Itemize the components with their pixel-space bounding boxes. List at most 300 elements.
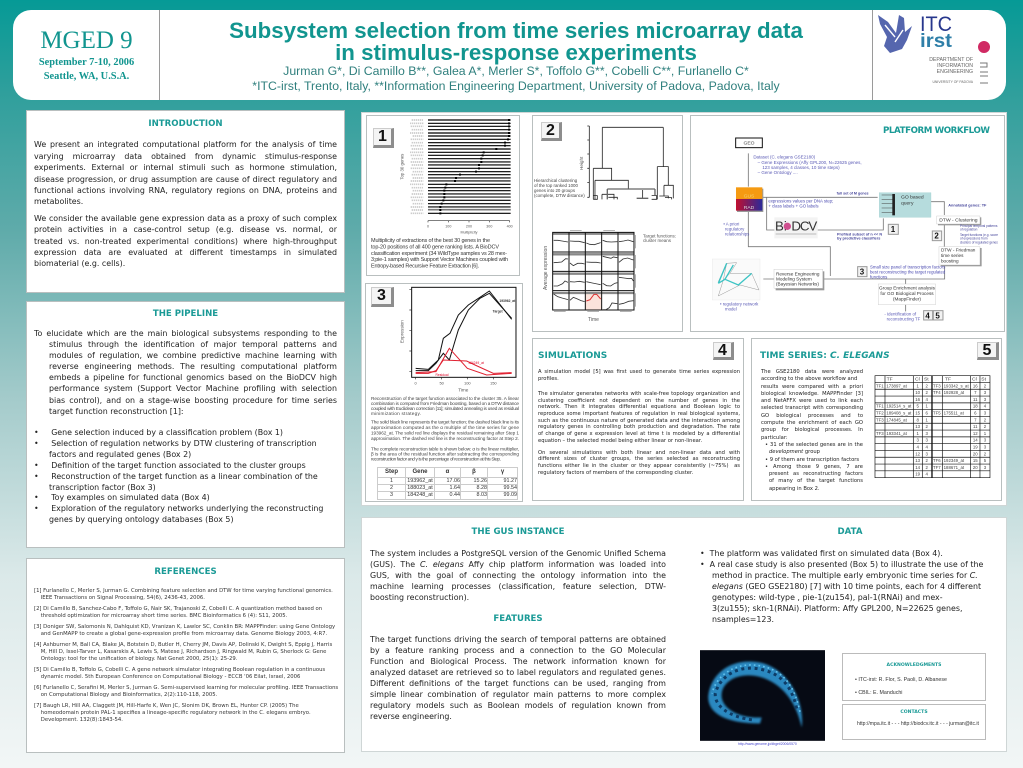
table: reconstruction steps: Gene: [412, 469, 428, 475]
table: transcription factors: 3: [925, 431, 928, 436]
table: transcription factors: 3: [984, 390, 987, 395]
table: reconstruction steps: 17.06: [446, 478, 460, 484]
panel: contacts: [842, 704, 986, 740]
badge 4: [713, 342, 734, 360]
chart: multiplicity dot plot: [400, 120, 513, 235]
table: transcription factors: 193342_s_at: [944, 383, 969, 388]
table: transcription factors: TF7: [933, 465, 941, 470]
block: GUS and RAD databases: RAD: [744, 205, 755, 211]
box: GEO: [736, 138, 762, 148]
list: pipeline steps: factors and regulated genes (Box 2): [49, 450, 191, 459]
text: introduction body: protein activities in a case-control setup (e.g. disease vs. normal, or: [34, 225, 337, 234]
text: features body: simple linear combination of regulator main patterns to more complex: [370, 690, 666, 698]
box: GEO: GEO: [743, 141, 755, 147]
text: box 1 caption: [371, 238, 508, 270]
table: transcription factors: 173897_at: [886, 383, 908, 388]
text: pipeline body: bias control), and on a stage-wise boosting procedure for time series: [49, 396, 337, 405]
panel: box 1: [366, 115, 520, 276]
text: acknowledgment names: • CBIL: E. Manduchi: [855, 690, 902, 696]
table: transcription factors: 1: [925, 417, 928, 422]
text: box 3 caption: approximation. The dashed red line is the reconstructing factor at Step 2.: [371, 436, 519, 441]
conference block: [13, 10, 160, 100]
text: pipeline body: modules of regulation, we combine predictive machine learning with: [49, 351, 337, 360]
list: pipeline steps: • Toy examples on simulated data (Box 4): [34, 493, 210, 502]
text: small size panel: functions: [870, 275, 887, 280]
table: transcription factors: 174845_at: [886, 417, 908, 422]
text: reference list: dynamic model. 5th European Conference on Computational Biology - ECCB '06 Eilat, Israel, 2006: [41, 674, 300, 680]
table: transcription factors: TF3: [876, 417, 884, 422]
text: dendrogram caption: (complete, DTW distance): [534, 193, 585, 198]
mini badges: 1: [891, 225, 896, 234]
text: small size panel: Small size panel of transcription factors: [870, 265, 945, 270]
table: transcription factors: 192928_at: [944, 390, 965, 395]
table: transcription factors: 12: [915, 451, 921, 456]
text: time series body: of many of the target functions: [769, 478, 863, 484]
table: transcription factors: 3: [984, 411, 987, 416]
text: time series body: [761, 369, 863, 492]
icon: red dot: [978, 41, 990, 53]
text: simulations body: [538, 369, 740, 476]
heading: introduction: INTRODUCTION: [148, 119, 223, 129]
table: transcription factors: 2: [984, 383, 987, 388]
chart: multiplicity dot plot: 0: [427, 225, 429, 229]
table: transcription factors: St: [924, 377, 929, 383]
label: small multiples legend and axes: [543, 234, 676, 323]
text: pipeline body: embeds a pipeline for functional genomics based on the BioDCV high: [49, 373, 337, 382]
chart: multiplicity dot plot: 300: [486, 225, 492, 229]
text: data bullets: method in practice. The multiple early embryonic time series for C.: [712, 570, 978, 580]
text: regulatory network model: model: [725, 306, 737, 311]
text: dataset description: – Gene Expressions (Affy GPL200, N=22625 genes,: [758, 160, 862, 165]
text: simulations body: functions either lie in the cluster or they appear consistently (~75%) as: [538, 463, 740, 469]
text: reference list: threshold optimization for microarray short time series. BMC Bioinformatics 6 (4): S11, 2005.: [41, 613, 287, 619]
table: transcription factors: 7: [974, 390, 977, 395]
text: profiled subset: [837, 232, 882, 241]
text: reference list: [2] Di Camillo B, Sanchez-Cabo F, Toffolo G, Nair SK, Trajanoski Z, Cobelli C. A quantization method based on: [34, 606, 322, 612]
table: reconstruction steps: [377, 467, 518, 500]
table: transcription factors: 2: [925, 383, 928, 388]
table: transcription factors: 6: [925, 411, 928, 416]
text: reference list: [5] Di Camillo B, Toffolo G, Cobelli C. A gene network simulator integrating Boolean regulation in a continuous: [34, 667, 325, 673]
badge 1: [373, 128, 394, 148]
text: simulations body: reproduce some important features of regulation in real biological systems,: [538, 411, 740, 417]
table: transcription factors: 3: [925, 451, 928, 456]
table: transcription factors: 11: [973, 424, 978, 429]
text: DTW outputs: of expressions from: [960, 237, 988, 241]
label: small multiples legend and axes: Average expression: [543, 246, 549, 290]
text: introduction body: varying microarray data obtained from dynamic stimulus-response: [34, 152, 337, 161]
text: DTW outputs: Target functions (e.g. score: [960, 233, 998, 237]
text: data bullets: • The platform was validated first on simulated data (Box 4).: [700, 548, 943, 558]
table: transcription factors: TF1: [876, 404, 884, 409]
heading: contacts: CONTACTS: [900, 710, 928, 715]
box: DTW Friedman boosting: boosting: [941, 258, 959, 263]
logo: department of information engineering: DEPARTMENT OF: [929, 57, 973, 63]
text: a priori relationships: regulatory: [725, 227, 745, 232]
chart: regulatory network: [712, 259, 760, 300]
chart: target reconstruction curves: 100: [464, 381, 471, 386]
table: transcription factors: 15: [915, 411, 921, 416]
text: dataset description: Dataset (C. elegans GSE2180): [753, 154, 816, 159]
table: transcription factors: 14: [915, 465, 921, 470]
table: reconstruction steps: 1.64: [450, 485, 460, 491]
panel: box 3: [365, 283, 523, 502]
text: introduction body: disease progression, or drug assumption are cause of direct regulatory and: [34, 175, 337, 184]
table: transcription factors: 19: [915, 472, 921, 477]
chart: target reconstruction curves: Residual: [436, 373, 449, 377]
chart: target reconstruction curves: Expression: [399, 320, 404, 343]
table: reconstruction steps: 99.09: [504, 492, 517, 498]
logo: ITC irst wordmark: ITC: [920, 13, 952, 36]
text: introduction body: biomaterial (e.g. cells).: [34, 259, 125, 268]
table: transcription factors: 2: [925, 465, 928, 470]
text: reference list: [1] Furlanello C, Merler S, Jurman G. Combining feature selection and DTW for time varying functional genomics.: [34, 588, 333, 594]
panel: centre figures background: [361, 112, 1007, 506]
heading: time series: TIME SERIES: C. ELEGANS: [760, 351, 890, 361]
panel: acknowledgments: [842, 653, 986, 701]
text: simulations body: of change of gene x expression level at time t is modeled by a differential: [538, 431, 740, 437]
text: time series body: according to the above workflow and: [761, 376, 857, 382]
text: box 3 caption: The solid black line represents the target function; the dashed black line is its: [371, 420, 520, 424]
table: transcription factors: TF3: [876, 431, 884, 436]
box: group enrichment: (MappFinder): [893, 296, 921, 301]
title: [229, 18, 804, 65]
mini badges: 4: [925, 311, 930, 320]
table: transcription factors: TF1: [876, 383, 884, 388]
text: data bullets: genotypes: wild-type , pie-1(zu154), pal-1(RNAi) and mex-: [712, 592, 943, 602]
text: simulations body: different sizes of cluster groups, the series selected as reconstructing: [538, 456, 740, 462]
text: introduction body: metabolites.: [34, 197, 83, 206]
logos column: [872, 10, 1006, 100]
text: time series body: results were compared with a priori: [761, 384, 863, 390]
table: transcription factors: 189408_s_at: [886, 411, 912, 416]
text: time series body: appearing in Box 2.: [769, 486, 820, 492]
panel: references: [26, 558, 345, 753]
text: simulations body: equation – the selected model being either linear or non-linear.: [538, 438, 702, 444]
text: dendrogram caption: [534, 178, 585, 198]
badge 4: 4: [718, 342, 727, 359]
caption: image link: http://www.genome.jp/dbget/2006/0570: [738, 742, 797, 746]
chart: target reconstruction curves: 193962_at: [499, 299, 516, 303]
table: reconstruction steps: 8.03: [476, 492, 487, 498]
table: reconstruction steps: 8.28: [476, 485, 487, 491]
text: small size panel: [870, 265, 946, 280]
text: box 3 caption: The complete reconstruction table is shown below: α is the linear multiplier,: [371, 446, 519, 452]
mini badges: [858, 224, 943, 320]
text: time series body: selected transcript with corresponding: [761, 405, 863, 411]
text: introduction body: experiments. External or internal stimuli such as hormone stimulation,: [34, 163, 337, 172]
text: a priori relationships: • A priori: [723, 222, 739, 227]
table: transcription factors: 1: [984, 431, 987, 436]
panel: lower section: [361, 517, 1007, 752]
text: pipeline body: target function reconstruction [1]:: [49, 407, 184, 416]
heading: data: DATA: [838, 527, 862, 537]
icon: ITC bird logo: [878, 15, 912, 53]
table: reconstruction steps: 193962_at: [407, 478, 433, 484]
text: GUS body: boosting reconstruction).: [370, 592, 469, 602]
logo: BioDCV: [774, 217, 818, 238]
text: data bullets: • A real case study is also presented (Box 5) to illustrate the use of the: [700, 560, 983, 568]
table: transcription factors: 3: [984, 465, 987, 470]
panel: the pipeline: [26, 301, 345, 548]
text: reference list: M, Hill D, Issel-Tarver L, Kasarskis A, Lewis S, Matese J, Richardson J, Ringwald M, Rubin G, Sherlock G: Gene: [41, 649, 326, 655]
table: reconstruction steps: 2: [390, 485, 393, 491]
text: pipeline body: performance system (Support Vector Machine profiling with selection: [49, 384, 337, 393]
table: reconstruction steps: α: [446, 469, 449, 475]
text: time series body: biological knowledge. MAPPFinder [3]: [761, 391, 863, 397]
text: introduction body: treated vs. non-treated experimental conditions) where high-throughput: [34, 237, 337, 246]
table: transcription factors: St: [981, 377, 987, 383]
text: simulations body: regulatory factors of members of the corresponding cluster.: [538, 470, 693, 476]
text: DTW outputs: Principal temporal patterns: [960, 224, 998, 228]
text: acknowledgment names: • ITC-irst: R. Flor, S. Paoli, D. Albanese: [855, 677, 947, 683]
text: time series body: group for biological processes. In: [761, 427, 863, 433]
logo: ITC irst wordmark: [920, 13, 953, 52]
table: transcription factors: 18: [973, 404, 978, 409]
text: reference list: [3] Doniger SW, Salomonis N, Dahlquist KD, Vranizan K, Lawlor SC, Conklin BR: MAPPFinder: using Gene Ontology: [34, 624, 335, 630]
panel: introduction: [26, 110, 345, 293]
box: group enrichment: [878, 284, 936, 305]
table: transcription factors: 19: [973, 445, 978, 450]
table: transcription factors: 7: [974, 417, 977, 422]
box: reverse engineering: Reverse Engineering: [776, 271, 820, 276]
text: reference list: IEEE Transactions on Signal Processing, 54(6), 2436-43, 2006.: [41, 595, 205, 601]
table: transcription factors: 3: [984, 397, 987, 402]
text: box 1 caption: top-20 positions of all 400 gene ranking lists. A BioDCV: [371, 244, 499, 250]
text: box 3 caption: Reconstruction of the target function associated to the cluster 35. A linear: [371, 396, 519, 401]
text: simulations body: regulatory genes in controlling both production and degradation. The rate: [538, 424, 740, 430]
logo: department of information engineering: ENGINEERING: [937, 69, 973, 75]
text: box 1 caption: Entropy-based Recursive Feature Extraction [6].: [371, 264, 479, 270]
list: pipeline steps: [34, 428, 323, 524]
text: time series body: particular:: [761, 435, 788, 441]
table: transcription factors: 16: [973, 383, 978, 388]
heading: the pipeline: THE PIPELINE: [153, 309, 218, 319]
text: time series body: The GSE2180 data were analyzed: [761, 369, 863, 375]
text: box 3 caption: approximation computed as the α multiple of the time series for gene: [371, 425, 519, 430]
table: transcription factors: Cl: [972, 377, 977, 383]
block: GUS and RAD databases: [736, 187, 763, 212]
text: time series body: compute the enrichment of each GO: [761, 420, 863, 426]
text: simulations body: clustering coefficient not dependent on the number of genes in the: [538, 398, 740, 404]
list: pipeline steps: • Selection of regulation networks by DTW clustering of transcription: [34, 439, 317, 448]
text: time series body: and NetAFFX were used to link each: [761, 398, 863, 404]
text: DTW outputs: clusters of regulated genes: [960, 240, 998, 244]
chart: multiplicity dot plot: 400: [507, 225, 513, 229]
table: transcription factors: Cl: [915, 377, 920, 383]
chart: multiplicity dot plot: 100: [445, 225, 451, 229]
heading: platform workflow: PLATFORM WORKFLOW: [883, 126, 990, 136]
title: Subsystem selection from time series microarray data: [229, 18, 803, 43]
text: expression values: expressions values per DNA step;: [768, 198, 833, 203]
table: transcription factors: 1: [916, 383, 919, 388]
box: GO based query: query: [901, 201, 914, 207]
text: regulatory network model: • regulatory network: [720, 301, 759, 306]
mini badges: 3: [860, 267, 865, 276]
text: time series body: • Among those 9 genes, 7 are: [765, 464, 863, 470]
text: dataset description: 123 samples, 4 classes, 10 time steps): [762, 165, 840, 170]
conference block: September 7-10, 2006: [39, 57, 134, 68]
chart: target reconstruction curves: 50: [439, 381, 445, 386]
table: reconstruction steps: 99.54: [504, 485, 517, 491]
list: pipeline steps: • Reconstruction of the target function as a linear combination of the: [34, 472, 318, 481]
text: features body: Different definitions of the target functions can be used, ranging from: [370, 678, 666, 688]
table: transcription factors: 3: [925, 438, 928, 443]
text: reference list: [34, 588, 338, 723]
text: regulatory network model: [720, 301, 759, 311]
table: transcription factors: 16: [915, 397, 921, 402]
text: time series body: GO biological processes and to: [761, 413, 863, 419]
text: features body: analyzed dataset are retrieved so to label regulators and regulated genes.: [370, 668, 666, 676]
text: simulations body: A simulation model [5] was first used to generate time series expression: [538, 369, 740, 375]
badge 1: 1: [378, 128, 387, 145]
table: transcription factors: 3: [984, 445, 987, 450]
text: box 3 caption: combination is computed from Friedman boosting, based on a DTW distance: [371, 401, 519, 406]
text: a priori relationships: relationships: [725, 232, 749, 237]
text: pipeline body: [34, 329, 337, 416]
heading: the GUS instance: THE GUS INSTANCE: [472, 527, 564, 537]
text: introduction body: expression data are evaluated at different timestamps in simulated: [34, 248, 337, 257]
badge 3: [371, 287, 394, 307]
text: features body: reverse engineering.: [370, 712, 452, 720]
badge 2: 2: [546, 122, 555, 139]
list: pipeline steps: transcription factor (Box 3): [49, 483, 156, 492]
text: GUS body: GUS, with the goal of connecting the ontology information into the: [370, 570, 666, 580]
table: transcription factors: 12: [973, 431, 978, 436]
text: reference list: [6] Furlanello C, Serafini M, Merler S, Jurman G. Semi-supervised learning for molecular profiling. IEEE Transactions: [34, 685, 338, 691]
table: transcription factors: 3: [916, 438, 919, 443]
table: transcription factors: TF3: [933, 383, 941, 388]
chart: target reconstruction curves: 150: [490, 381, 497, 386]
text: pipeline body: reverse engineering methods. The resulting computational platform: [49, 362, 337, 371]
table: transcription factors: TF2: [876, 411, 884, 416]
chart: multiplicity dot plot: Top 30 genes: [400, 154, 405, 180]
box: group enrichment: for GO Biological Process: [880, 291, 934, 296]
box: DTW Friedman boosting: DTW - Friedman: [941, 248, 976, 253]
heading: references: REFERENCES: [154, 567, 217, 577]
table: reconstruction steps: 3: [390, 492, 393, 498]
text: box 3 caption: β is the area of the residual function after subtracting the corresponding: [371, 452, 519, 456]
chart: target reconstruction curves: Time: [458, 388, 469, 393]
table: transcription factors: 3: [984, 438, 987, 443]
table: transcription factors: 188671_at: [944, 465, 965, 470]
logo: department of information engineering: [929, 57, 988, 84]
text: pipeline body: To elucidate which are the main biological subsystems responding to the: [34, 329, 337, 338]
text: data bullets: elegans (GEO GSE2180) [7] with 10 time points, each for 4 different: [712, 582, 981, 590]
text: introduction body: We consider the available gene expression data as a proxy of such complex: [34, 214, 337, 223]
chart: target reconstruction curves: 184249_at: [468, 361, 484, 365]
table: transcription factors: 2: [984, 451, 987, 456]
text: simulations body: On several simulations with both linear and non-linear data and with: [538, 450, 740, 456]
panel: time series: [751, 338, 1002, 501]
text: pipeline body: stimulus through the identification of major temporal patterns and: [49, 340, 337, 349]
list: pipeline steps: • Gene selection induced by a classification problem (Box 1): [34, 428, 283, 437]
text: box 1 caption: 3;pie-1 samples) with Support Vector Machines coupled with: [371, 257, 508, 263]
text: reference list: Development. 132(8):1843-54.: [41, 717, 123, 723]
image: C. elegans worm micrograph: [700, 650, 825, 741]
text: dendrogram caption: genes into 20 groups: [534, 188, 576, 193]
table: transcription factors: 10: [915, 390, 921, 395]
text: box 3 caption: minimization strategy.: [371, 411, 421, 416]
box: GO based query: GO based: [901, 194, 924, 200]
text: GUS body: (GUS). The C. elegans Affy chip platform information was loaded into: [370, 560, 666, 568]
logo: BioDCV: DCV: [791, 219, 817, 234]
connectors: [748, 153, 945, 311]
logo: department of information engineering: INFORMATION: [937, 63, 973, 69]
mini badges: 2: [934, 232, 939, 241]
text: expression values: [768, 198, 833, 209]
text: box 3 caption: [371, 396, 520, 462]
table: transcription factors: 13: [915, 458, 921, 463]
box: group enrichment: Group Enrichment analysis: [879, 286, 936, 291]
text: simulations body: network. Then it integrates differential equations and Boolean logic to: [538, 404, 740, 410]
header banner: [13, 10, 1006, 100]
block: GUS and RAD databases: GUS: [744, 194, 755, 200]
table: transcription factors: 15: [973, 458, 978, 463]
logo: BioDCV: Bi: [775, 219, 787, 234]
badge 3: 3: [377, 287, 386, 304]
text: reference list: and GenMAPP to create a global gene-expression profile from microarray data. Genome Biology 2003, 4:R7.: [41, 631, 327, 637]
text: identification of TF: [884, 311, 921, 322]
text: data bullets: nsamples=123.: [712, 614, 774, 624]
text: GUS body: machine learning processes (classification, feature selection, DTW-: [370, 582, 666, 590]
text: time series body: • 9 of them are transcription factors: [765, 457, 859, 463]
conference block: Seattle, WA, U.S.A.: [44, 71, 129, 82]
label: small multiples legend and axes: Target functions:: [643, 234, 676, 238]
text: features body: [370, 634, 666, 720]
box: GO based query: [879, 193, 931, 217]
text: dendrogram caption: Hierarchical clustering: [534, 178, 578, 183]
table: transcription factors: 2: [925, 390, 928, 395]
highlighted cluster: [585, 292, 602, 310]
text: reference list: on Computational Biology and Bioinformatics, 2(2):110-118, 2005.: [41, 692, 217, 698]
table: transcription factors: 11: [973, 397, 978, 402]
chart: target reconstruction curves: Target: [493, 309, 504, 313]
table: transcription factors: 192514_s_at: [886, 404, 912, 409]
badge 2: [541, 122, 562, 141]
table: transcription factors: 2: [984, 417, 987, 422]
text: data bullets: 3(zu155); skn-1(RNAi). Platform: Affy GPL200, N=22625 genes,: [712, 604, 963, 612]
text: contact links: http://mpa.itc.it - - - http://biodcv.itc.it - - - jurman@itc.it: [857, 721, 979, 727]
table: transcription factors: 193341_at: [886, 431, 908, 436]
list: pipeline steps: genes by querying ontology databases (Box 5): [49, 515, 234, 524]
list: pipeline steps: • Definition of the target function associated to the cluster groups: [34, 461, 306, 470]
text: time series body: development group: [769, 449, 820, 455]
table: transcription factors: 4: [925, 472, 928, 477]
table: transcription factors: 4: [925, 445, 928, 450]
chart: target reconstruction curves: [399, 287, 516, 393]
title: in stimulus-response experiments: [335, 40, 697, 65]
chart: target reconstruction curves: 0: [415, 381, 418, 386]
chart: hierarchical clustering dendrogram: [587, 126, 673, 199]
table: transcription factors: 1: [916, 431, 919, 436]
text: introduction body: We present an integrated computational platform for the analysis of time: [34, 140, 337, 149]
table: transcription factors: 20: [973, 465, 978, 470]
chart: cluster small multiples: [553, 230, 635, 312]
text: box 3 caption: reconstruction factor and γ is the percentage of reconstruction at this Step.: [371, 456, 501, 462]
table: transcription factors: 6: [974, 411, 977, 416]
table: transcription factors: 2: [925, 458, 928, 463]
authors and affiliations: *ITC-irst, Trento, Italy, **Information Engineering Department, University of Padova, Padova, Italy: [252, 78, 780, 92]
text: identification of TF: reconstructing TF: [887, 317, 921, 322]
text: DTW outputs: [960, 224, 998, 244]
table: reconstruction steps: γ: [501, 469, 504, 475]
badge 5: 5: [983, 342, 991, 359]
text: time series body: • 31 of the selected genes are in the: [765, 442, 863, 448]
table: transcription factors: 5: [916, 404, 919, 409]
box: DTW Friedman boosting: [939, 247, 982, 266]
logo: ITC irst wordmark: irst: [920, 31, 953, 52]
